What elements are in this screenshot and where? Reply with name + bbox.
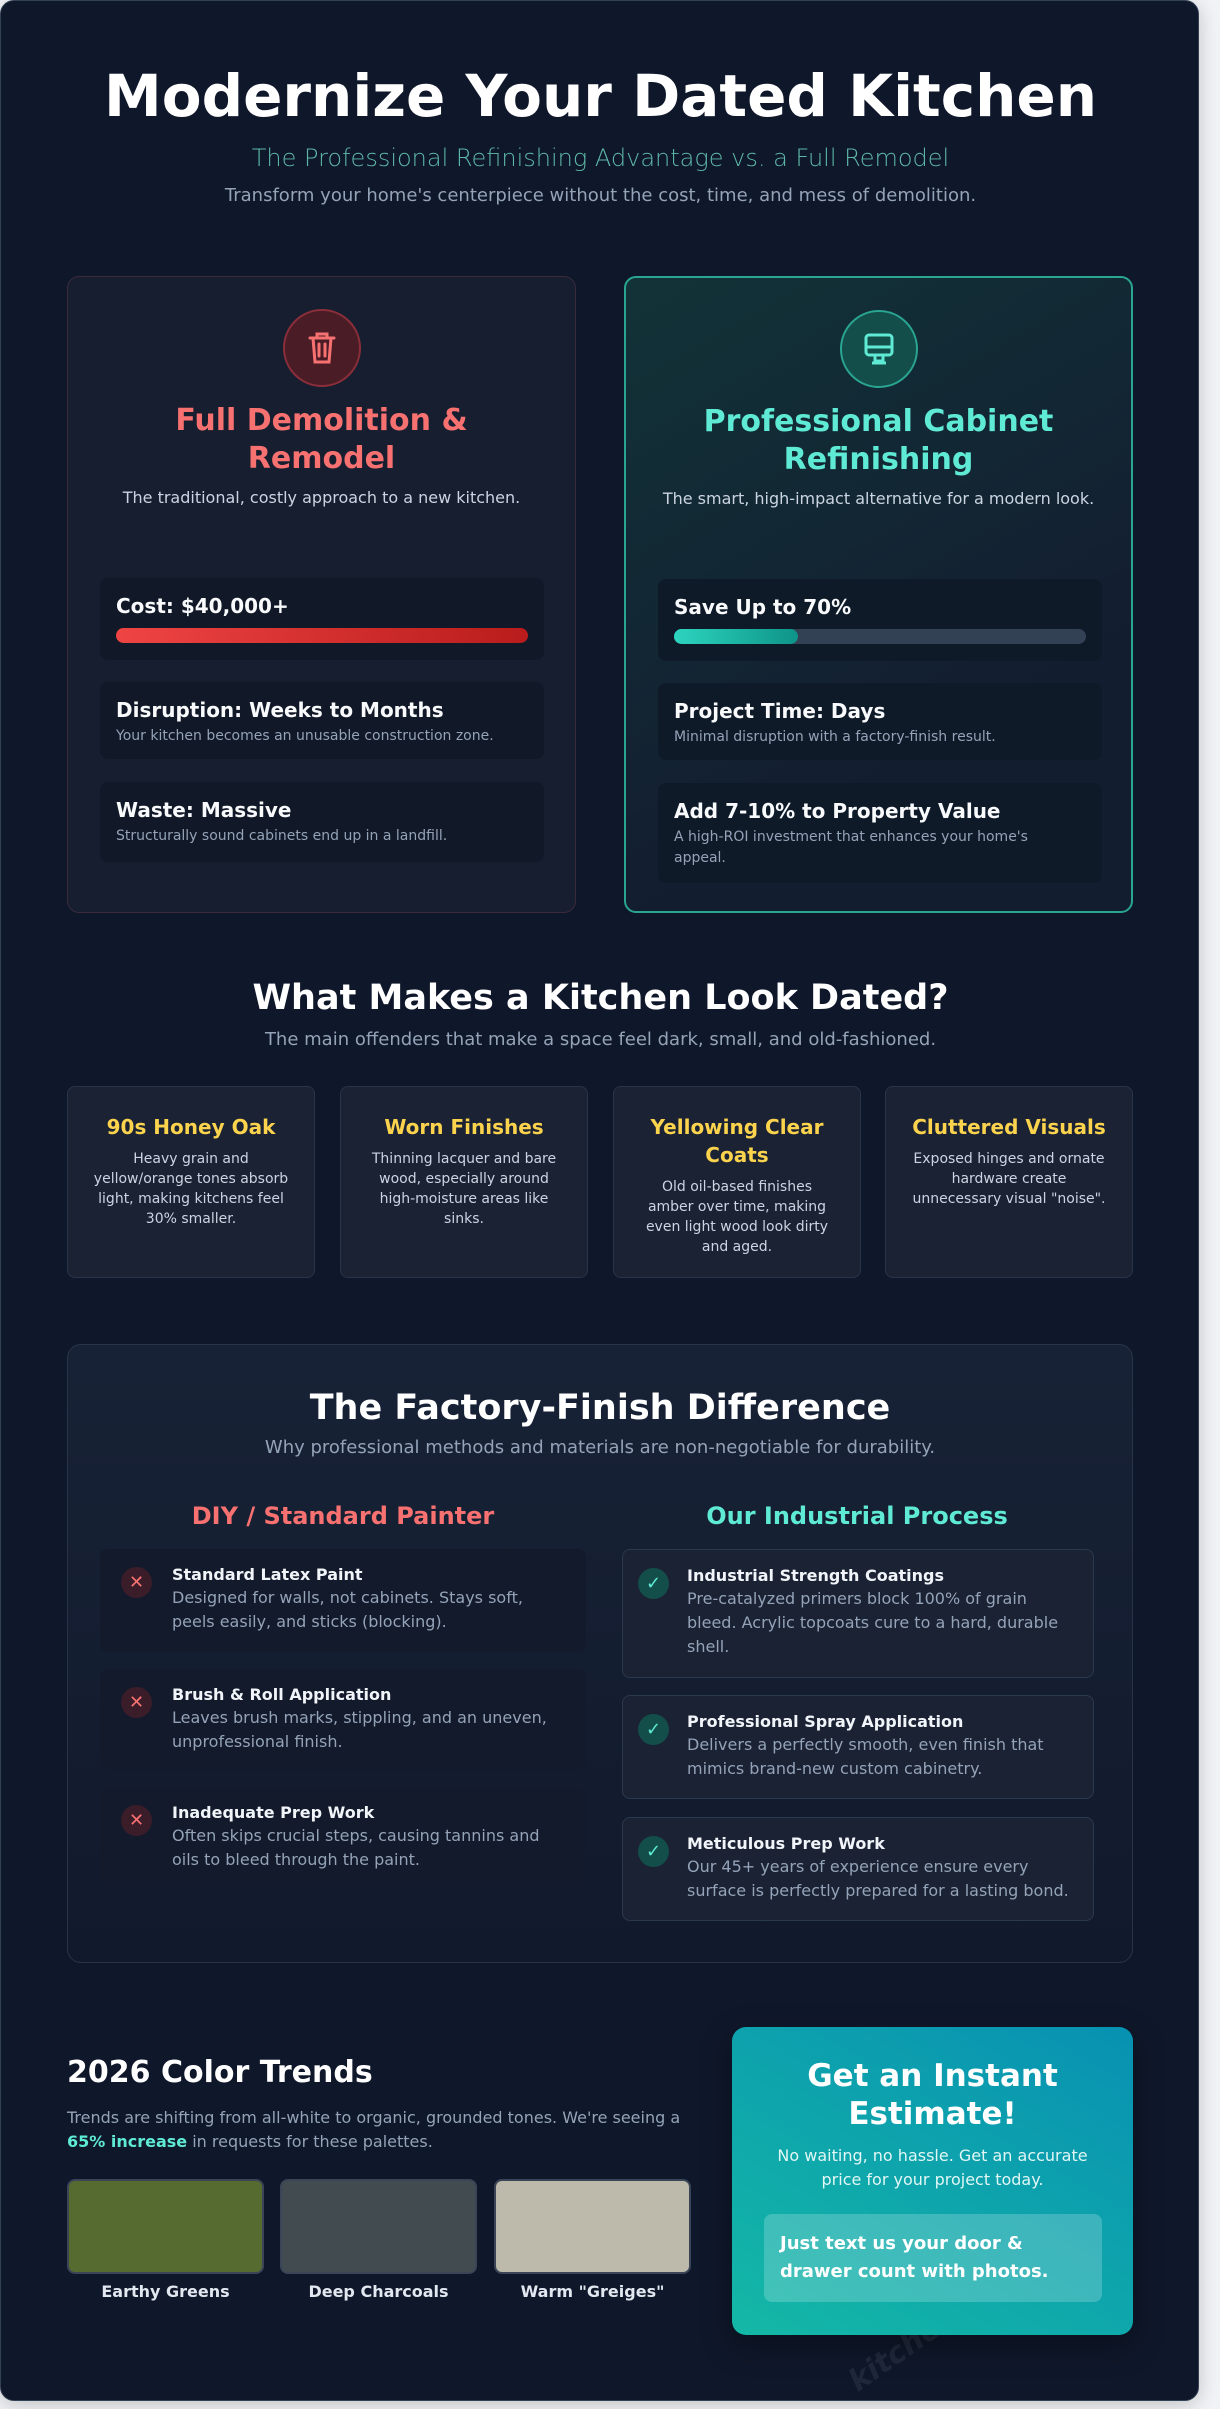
heading: color trends: 2026 Color Trends — [67, 2055, 373, 2090]
icon: trash — [283, 309, 361, 387]
swatch: charcoal — [280, 2179, 477, 2274]
item: spray: Delivers a perfectly smooth, even finish that mimics brand-new custom cabinetry. — [687, 1735, 1044, 1778]
column title: DIY: DIY / Standard Painter — [192, 1502, 494, 1530]
stat: disruption: Disruption: Weeks to Months — [116, 698, 444, 722]
subtitle: The Professional Refinishing Advantage vs. a Full Remodel — [252, 144, 949, 172]
card title: Refinishing — [784, 442, 973, 477]
item: meticulous: Our 45+ years of experience ensure every surface is perfectly prepared for a lasting bond. — [687, 1857, 1069, 1900]
heading: dated: What Makes a Kitchen Look Dated? — [252, 978, 949, 1018]
stat: disruption: Your kitchen becomes an unusable construction zone. — [116, 728, 494, 744]
card: honey oak: 90s Honey Oak — [107, 1115, 275, 1139]
stat: value: Add 7-10% to Property Value — [674, 799, 1000, 823]
panel: factory finish — [67, 1344, 1133, 1963]
card: yellowing: Old oil-based finishes amber over time, making even light wood look dirty and aged. — [646, 1179, 828, 1255]
card title: Full Demolition & — [175, 403, 468, 438]
item: latex: ✕ — [129, 1572, 144, 1593]
item: coatings: Pre-catalyzed primers block 100% of grain bleed. Acrylic topcoats cure to a hard, durable shell. — [687, 1589, 1058, 1656]
label: greige: Warm "Greiges" — [521, 2282, 664, 2301]
item: prep: Often skips crucial steps, causing tannins and oils to bleed through the paint. — [172, 1826, 540, 1869]
swatch: greens — [67, 2179, 264, 2274]
CTA title: Estimate! — [848, 2096, 1017, 2132]
card desc: The traditional, costly approach to a new kitchen. — [123, 488, 520, 507]
column title: ours: Our Industrial Process — [706, 1502, 1008, 1530]
CTA title: Get an Instant — [807, 2058, 1058, 2094]
stat: save — [658, 579, 1102, 661]
item: prep — [100, 1787, 586, 1887]
tagline: Transform your home's centerpiece without the cost, time, and mess of demolition. — [225, 185, 976, 206]
subheading: Why professional methods and materials are non-negotiable for durability. — [265, 1437, 935, 1458]
stat: waste: Structurally sound cabinets end up in a landfill. — [116, 828, 447, 844]
item: prep: Inadequate Prep Work — [172, 1803, 374, 1822]
item: spray — [622, 1695, 1094, 1799]
stat: waste: Waste: Massive — [116, 798, 292, 822]
item: prep: ✕ — [129, 1810, 144, 1831]
item: meticulous: Meticulous Prep Work — [687, 1834, 885, 1853]
stat: value — [658, 783, 1102, 883]
stat: cost: Cost: $40,000+ — [116, 594, 289, 618]
stat: save: Save Up to 70% — [674, 595, 851, 619]
item: coatings: Industrial Strength Coatings — [687, 1566, 944, 1585]
item: brush: Leaves brush marks, stippling, and an uneven, unprofessional finish. — [172, 1708, 547, 1751]
card: worn — [340, 1086, 588, 1278]
card: cluttered — [885, 1086, 1133, 1278]
swatch: greige — [494, 2179, 691, 2274]
item: spray: Professional Spray Application — [687, 1712, 963, 1731]
item: latex: Designed for walls, not cabinets. Stays soft, peels easily, and sticks (blocking). — [172, 1588, 523, 1631]
card desc: The smart, high-impact alternative for a modern look. — [663, 489, 1094, 508]
item: meticulous: ✓ — [646, 1841, 661, 1862]
text: trends: Trends are shifting from all-white to organic, grounded tones. We're seeing a 65% increase in requests for these palettes. — [67, 2108, 680, 2151]
card title: Professional Cabinet — [704, 404, 1053, 439]
panel: refinishing — [624, 276, 1133, 913]
stat: value: A high-ROI investment that enhances your home's appeal. — [674, 829, 1028, 866]
card: cluttered: Exposed hinges and ornate hardware create unnecessary visual "noise". — [912, 1151, 1106, 1207]
card: worn: Worn Finishes — [384, 1115, 544, 1139]
card title — [175, 403, 468, 476]
CTA inner — [764, 2214, 1102, 2302]
item: brush: ✕ — [129, 1692, 144, 1713]
CTA title — [807, 2058, 1058, 2132]
card: honey oak: Heavy grain and yellow/orange tones absorb light, making kitchens feel 30% smaller. — [94, 1151, 288, 1227]
item: spray: ✓ — [646, 1719, 661, 1740]
item: latex: Standard Latex Paint — [172, 1565, 363, 1584]
title: Modernize Your Dated Kitchen — [104, 62, 1097, 130]
item: coatings — [622, 1549, 1094, 1678]
item: brush — [100, 1669, 586, 1770]
heading: The Factory-Finish Difference — [310, 1388, 890, 1428]
stat: disruption — [100, 682, 544, 759]
card: cluttered: Cluttered Visuals — [912, 1115, 1106, 1139]
CTA inner: Just text us your door & drawer count with photos. — [780, 2233, 1048, 2282]
stat: time: Project Time: Days — [674, 699, 885, 723]
stat: waste — [100, 782, 544, 862]
stat: cost — [100, 578, 544, 660]
item: coatings: ✓ — [646, 1573, 661, 1594]
item: meticulous — [622, 1817, 1094, 1921]
item: brush: Brush & Roll Application — [172, 1685, 391, 1704]
card title — [704, 404, 1053, 477]
card: yellowing: Yellowing Clear Coats — [651, 1115, 823, 1167]
label: greens: Earthy Greens — [101, 2282, 230, 2301]
item: latex — [100, 1549, 586, 1652]
icon: cabinet — [840, 310, 918, 388]
label: charcoal: Deep Charcoals — [308, 2282, 449, 2301]
card: worn: Thinning lacquer and bare wood, especially around high-moisture areas like sinks. — [372, 1151, 556, 1227]
card title: Remodel — [248, 441, 395, 476]
stat: time: Minimal disruption with a factory-finish result. — [674, 729, 996, 745]
CTA box — [732, 2027, 1133, 2335]
card: honey oak — [67, 1086, 315, 1278]
stat: time — [658, 683, 1102, 760]
panel: full demolition — [67, 276, 576, 913]
CTA desc: No waiting, no hassle. Get an accurate price for your project today. — [777, 2146, 1088, 2189]
card: yellowing — [613, 1086, 861, 1278]
watermark: kitchen — [842, 2298, 965, 2399]
subheading: The main offenders that make a space feel dark, small, and old-fashioned. — [265, 1029, 936, 1050]
